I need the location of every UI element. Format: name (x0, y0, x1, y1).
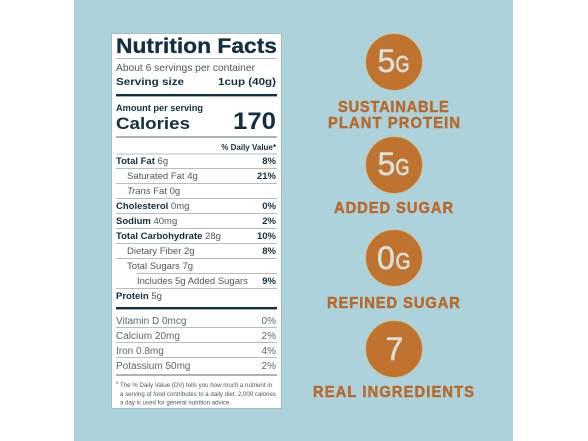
stat: 5g added sugar: 5 (378, 146, 395, 182)
servings info: 1cup (40g) (218, 76, 276, 88)
stat: 7 real ingredients (313, 320, 474, 401)
footnote: a day is used for general nutrition advice. (120, 400, 231, 406)
vitamins and minerals: Potassium 50mg (116, 361, 190, 372)
nutrient rows: Dietary Fiber 2g (127, 246, 195, 257)
vitamins and minerals: Vitamin D 0mcg (116, 316, 186, 327)
servings info (116, 62, 276, 88)
footnote (116, 381, 277, 406)
vitamins and minerals (116, 316, 277, 372)
nutrient rows: 21% (257, 171, 277, 182)
stat: 0g refined sugar (327, 230, 460, 312)
footnote: * (116, 381, 119, 388)
stat: 7 real ingredients: 7 (386, 331, 403, 367)
nutrient rows: Cholesterol 0mg (116, 201, 189, 212)
nutrient rows: Total Sugars 7g (127, 261, 193, 272)
vitamins and minerals: 2% (262, 331, 276, 342)
calories (116, 103, 276, 135)
nutrient rows: Sodium 40mg (116, 216, 177, 227)
stat: 5g sustainable plant protein: SUSTAINABLE (338, 98, 449, 116)
nutrition facts label (112, 34, 282, 408)
servings info: Serving size (116, 76, 184, 88)
nutrient rows: 9% (262, 276, 277, 287)
calories: Amount per serving (116, 103, 203, 114)
stat: 5g sustainable plant protein: PLANT PROTEIN (328, 114, 460, 132)
stat: 7 real ingredients: REAL INGREDIENTS (313, 383, 474, 401)
stat: 0g refined sugar: REFINED SUGAR (327, 294, 460, 312)
vitamins and minerals: Iron 0.8mg (116, 346, 164, 357)
stat: 5g added sugar (334, 136, 453, 217)
servings info: About 6 servings per container (116, 62, 255, 74)
stat: 5g sustainable plant protein: 5 (378, 43, 395, 79)
nutrient rows: 0% (262, 201, 277, 212)
nutrient rows: Trans Fat 0g (127, 186, 180, 197)
stat: 5g sustainable plant protein (328, 34, 460, 132)
vitamins and minerals: 4% (262, 346, 276, 357)
calories: Calories (116, 114, 190, 133)
background panel (74, 0, 513, 441)
nutrient rows: 2% (262, 216, 277, 227)
nutrient rows: 8% (262, 156, 277, 167)
stat: 5g added sugar: G (396, 154, 410, 180)
footnote: The % Daily Value (DV) tells you how much a nutrient in (120, 382, 272, 389)
nutrient rows: Includes 5g Added Sugars (137, 276, 248, 287)
nutrient rows (116, 154, 277, 302)
vitamins and minerals: 0% (262, 316, 276, 327)
vitamins and minerals: Calcium 20mg (116, 331, 180, 342)
nutrient rows: Protein 5g (116, 291, 162, 302)
stat: 0g refined sugar: G (396, 248, 410, 274)
nutrient rows: Saturated Fat 4g (127, 171, 198, 182)
vitamins and minerals: 2% (262, 361, 276, 372)
stat: 5g sustainable plant protein: G (396, 51, 410, 77)
daily value heading: % Daily Value* (221, 143, 277, 152)
nutrient rows: 8% (262, 246, 277, 257)
stat: 0g refined sugar: 0 (377, 240, 395, 276)
nutrient rows: 10% (257, 231, 277, 242)
title: Nutrition Facts (116, 35, 277, 58)
footnote: a serving of food contributes to a daily diet. 2,000 calories (120, 391, 277, 398)
nutrient rows: Total Carbohydrate 28g (116, 231, 221, 242)
stat: 5g added sugar: ADDED SUGAR (334, 199, 453, 217)
nutrient rows: Total Fat 6g (116, 156, 168, 167)
calories: 170 (233, 108, 276, 135)
